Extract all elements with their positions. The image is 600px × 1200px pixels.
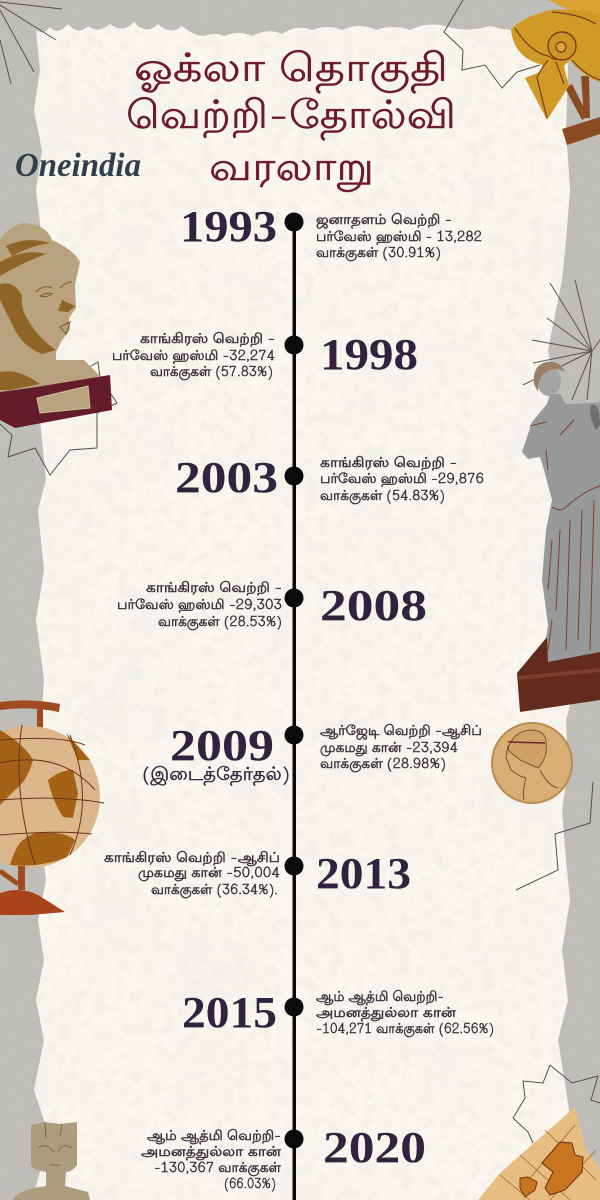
icon: wooden figure (13, 1122, 90, 1200)
entry 2003: பர்வேஸ் ஹஸ்மி -29,876 (320, 472, 484, 489)
entry 2020: 2020 (323, 1123, 426, 1172)
entry 2020 (141, 1123, 426, 1194)
entry 2013: வாக்குகள் (36.34%). (151, 883, 278, 900)
entry 2008: காங்கிரஸ் வெற்றி - (146, 581, 282, 598)
entry 1993: பர்வேஸ் ஹஸ்மி - 13,282 (316, 230, 482, 247)
entry 2008: வாக்குகள் (28.53%) (158, 615, 282, 632)
entry 2003: 2003 (175, 453, 278, 502)
icon: star outline near helmet (444, 0, 540, 88)
entry 2009 (142, 721, 482, 787)
entry 2020: அமனத்துல்லா கான் (141, 1146, 281, 1162)
icon: sunburst right (523, 280, 600, 400)
entry 2015: -104,271 வாக்குகள் (62.56%) (316, 1022, 494, 1039)
entry 2013: முகமது கான் -50,004 (138, 866, 280, 883)
entry 2020: -130,367 வாக்குகள் (154, 1161, 282, 1178)
entry 2008 (117, 581, 427, 632)
entry 2009: 2009 (170, 721, 274, 770)
entry 1998: 1998 (320, 330, 418, 379)
entry 2003: காங்கிரஸ் வெற்றி - (320, 456, 457, 473)
entry 2003: வாக்குகள் (54.83%) (320, 489, 445, 506)
entry 2015 (182, 988, 494, 1039)
entry 2013: 2013 (316, 849, 411, 898)
icon: armless statue (517, 362, 600, 712)
entry 2013 (104, 849, 411, 900)
entry 1993: வாக்குகள் (30.91%) (316, 246, 441, 263)
entry 1993 (180, 202, 482, 263)
icon: globe (0, 700, 104, 915)
title (126, 49, 456, 195)
entry 2015: அமனத்துல்லா கான் (316, 1007, 456, 1023)
icon: bust on pedestal (0, 223, 117, 475)
entry 2015: 2015 (182, 988, 277, 1037)
entry 2003 (175, 453, 484, 506)
entry 2009: ஆர்ஜேடி வெற்றி -ஆசிப் (320, 724, 482, 741)
entry 1998 (112, 330, 418, 382)
icon: portrait coin (492, 723, 572, 803)
decorative sunburst top left (0, 2, 62, 84)
entry 1993: 1993 (180, 202, 277, 251)
entry 2009: வாக்குகள் (28.98%) (320, 757, 446, 774)
entry 1998: வாக்குகள் (57.83%) (150, 365, 273, 382)
entry 1998: காங்கிரஸ் வெற்றி - (140, 332, 275, 349)
entry 2020: (66.03%) (224, 1177, 276, 1194)
entry 2008: பர்வேஸ் ஹஸ்மி -29,303 (117, 598, 282, 615)
entry 2009: (இடைத்தேர்தல்) (142, 765, 290, 787)
title: வரலாறு (209, 148, 374, 195)
timeline dots (284, 212, 304, 1148)
entry 2009: முகமது கான் -23,394 (320, 741, 458, 758)
entry 2013: காங்கிரஸ் வெற்றி -ஆசிப் (104, 851, 280, 868)
timeline line (292, 222, 296, 1200)
icon: old map (478, 1107, 600, 1200)
icon: helmet (511, 0, 600, 145)
entry 1993: ஜனாதளம் வெற்றி - (316, 213, 452, 230)
entry 2008: 2008 (320, 581, 427, 630)
icon: star outline bottom right (513, 1065, 600, 1143)
title: ஓக்லா தொகுதி (134, 49, 448, 96)
title: வெற்றி-தோல்வி (126, 96, 456, 143)
entry 2015: ஆம் ஆத்மி வெற்றி- (316, 990, 444, 1007)
entry 1998: பர்வேஸ் ஹஸ்மி -32,274 (112, 349, 275, 366)
decorative crack line (516, 782, 593, 890)
entry 2020: ஆம் ஆத்மி வெற்றி- (147, 1129, 281, 1146)
logo: Oneindia: Oneindia (15, 147, 141, 184)
